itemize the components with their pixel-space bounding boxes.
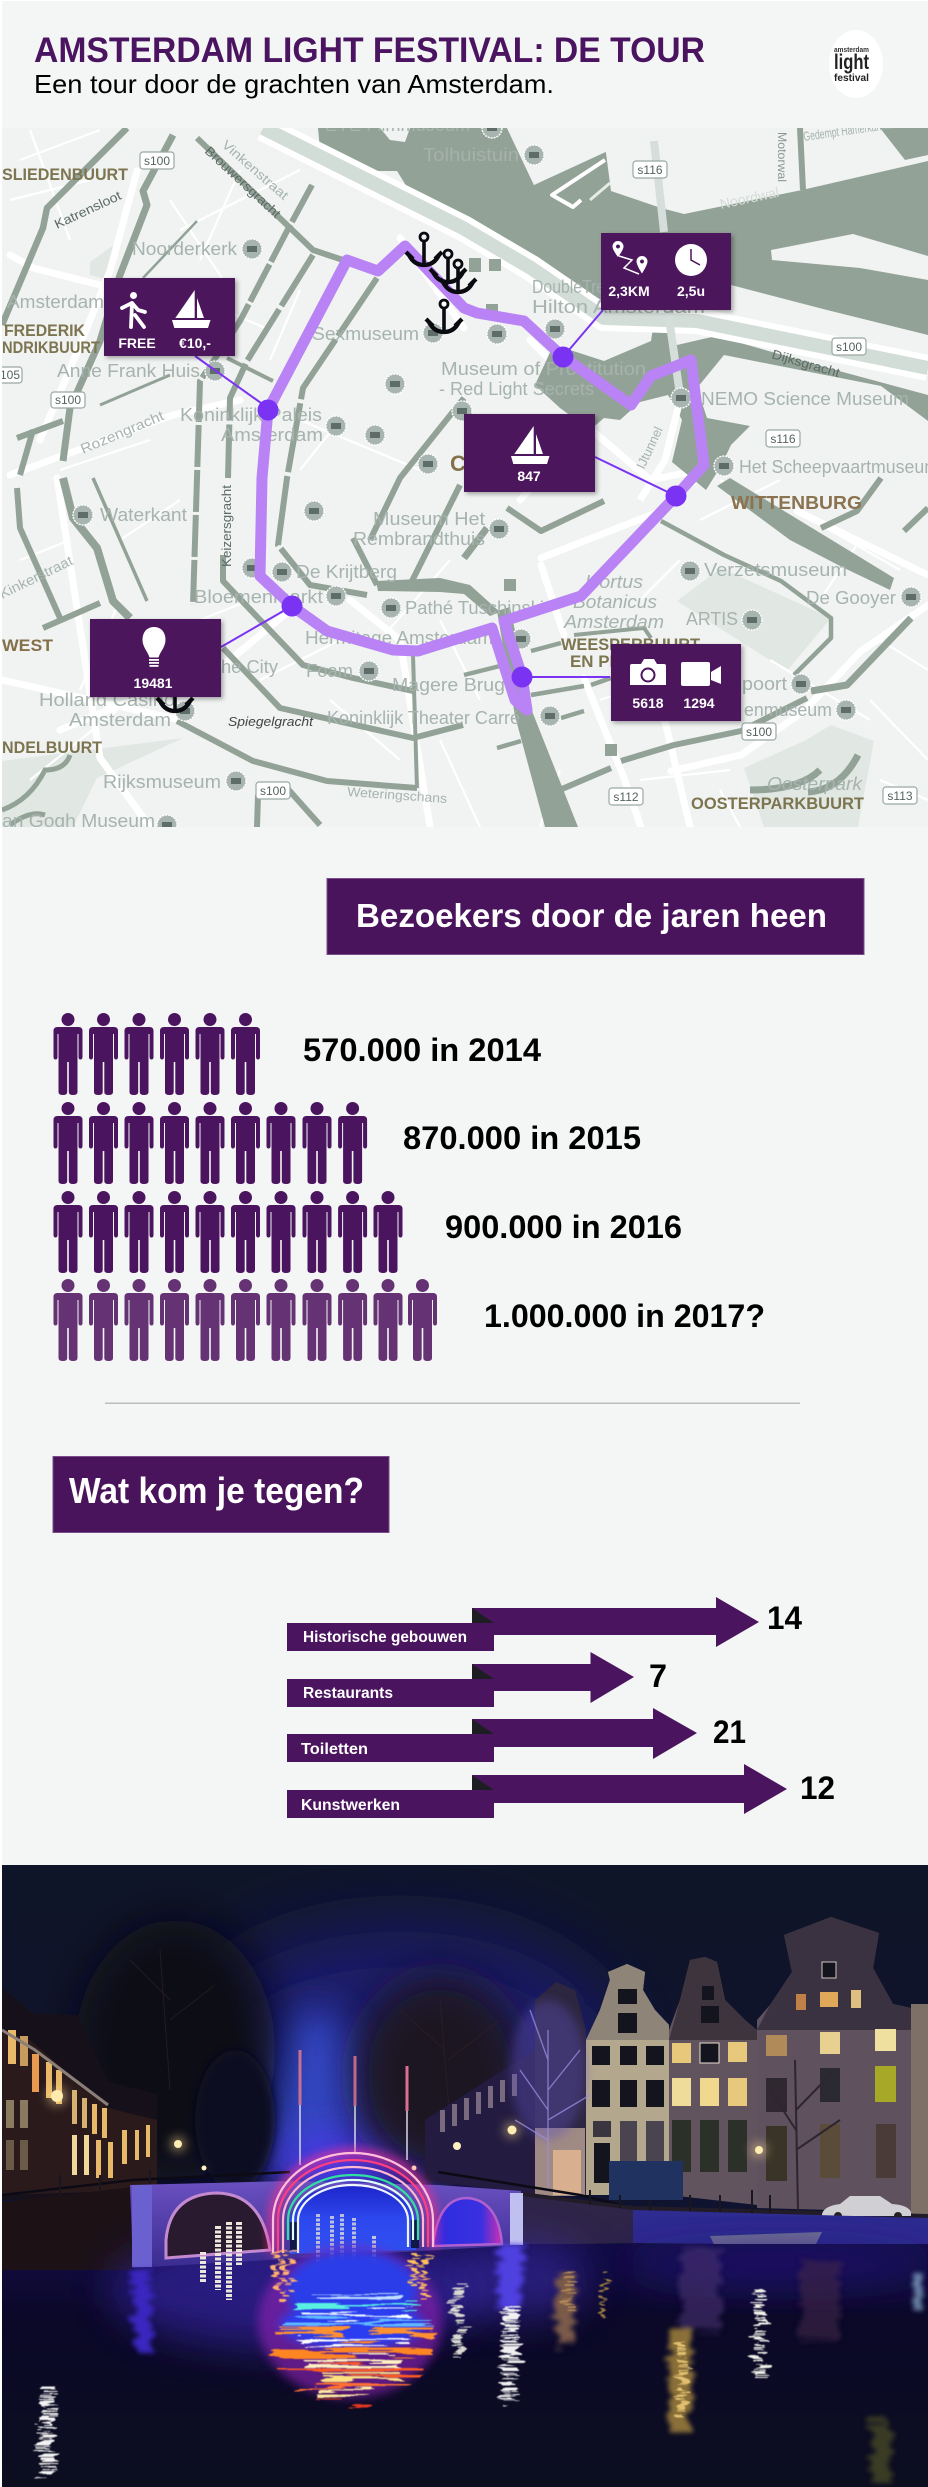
map labels: EYE Filmmuseum	[325, 115, 470, 135]
callout: free walk and boat price: FREE	[118, 335, 156, 351]
road shields	[0, 152, 917, 805]
callout: free walk and boat price	[104, 278, 235, 356]
map labels: OOSTERPARKBUURT	[691, 794, 865, 813]
callout: boats count: 847	[517, 468, 541, 484]
road shields: 105	[0, 368, 20, 382]
logo: amsterdam light festival: amsterdam	[834, 47, 869, 54]
map labels: Oosterpark	[767, 774, 863, 794]
heading: wat kom je tegen	[53, 1456, 389, 1532]
map labels: Museum Het	[373, 509, 485, 529]
road shields: s100	[55, 393, 81, 407]
rainbow arches	[273, 2153, 433, 2253]
map labels: Spiegelgracht	[228, 714, 314, 729]
title: AMSTERDAM LIGHT FESTIVAL: DE TOUR	[34, 31, 705, 70]
road shields: s100	[144, 154, 170, 168]
callout: boats count	[464, 414, 595, 492]
map labels: Katrensloot	[52, 188, 124, 232]
map labels: ARTIS	[686, 609, 738, 629]
water bodies	[318, 128, 928, 827]
row 2014: 570.000 in 2014	[303, 1032, 541, 1068]
central colourful reflection	[258, 2246, 442, 2408]
map labels: Rozengracht	[78, 407, 166, 457]
map labels: Magere Brug	[392, 675, 505, 695]
map labels: Motorwal	[775, 132, 789, 182]
map labels: De Krijtberg	[296, 562, 397, 582]
quay walls	[521, 2196, 633, 2245]
arrow: toiletten: 21	[713, 1714, 746, 1750]
callout: photos and videos count: 5618	[632, 695, 664, 711]
map labels: Dijksgracht	[770, 346, 842, 380]
road shields: s100	[836, 340, 862, 354]
map labels: WEST	[2, 636, 54, 655]
map labels: Holland Casino	[39, 690, 175, 710]
map labels: De Gooyer	[806, 588, 896, 608]
map labels: Rijksmuseum	[103, 772, 221, 792]
map labels: Keizersgracht	[219, 485, 234, 567]
railing and quay ground	[2, 2170, 624, 2205]
map labels: NEMO Science Museum	[701, 389, 909, 409]
arrow: restaurants	[287, 1652, 667, 1707]
callout: free walk and boat price: €10,-	[179, 335, 211, 351]
logo: amsterdam light festival: festival	[834, 72, 869, 84]
map labels: poort	[742, 674, 787, 694]
right buildings	[535, 1982, 586, 2195]
bridge	[130, 2181, 521, 2268]
row 2015: 870.000 in 2015	[403, 1120, 641, 1156]
map labels: Koninklijk Paleis	[180, 405, 322, 425]
map labels: Foam	[306, 661, 353, 681]
reflections in the arches	[203, 2214, 374, 2300]
callout: light bulbs count: 19481	[134, 675, 173, 691]
icon: walking person	[122, 292, 145, 327]
panel: header	[34, 30, 883, 99]
map labels: Tolhuistuin	[423, 145, 519, 165]
subtitle: Een tour door de grachten van Amsterdam.	[34, 69, 554, 99]
map labels: Waterkant	[100, 505, 187, 525]
street lights	[51, 2090, 763, 2170]
map labels: - Red Light Secrets	[439, 379, 594, 399]
arrow: historische gebouwen	[287, 1597, 802, 1651]
map labels: EN PLANTAGE	[570, 652, 690, 671]
callout: photos and videos count: 1294	[683, 695, 715, 711]
heading: bezoekers: Bezoekers door de jaren heen	[356, 897, 827, 934]
callout: distance and duration	[601, 233, 731, 310]
map labels: Noorderkerk	[132, 239, 238, 259]
map labels: Sexmuseum	[312, 324, 419, 344]
small boat	[710, 2232, 822, 2244]
map labels: Botanicus	[573, 592, 657, 612]
road shields: s113	[887, 789, 913, 803]
left arch	[166, 2193, 270, 2258]
blue truck	[609, 2161, 683, 2200]
arrow: historische gebouwen: 14	[767, 1600, 802, 1636]
map labels: NDELBUURT	[2, 738, 103, 757]
tour route line	[260, 246, 704, 710]
map labels: Rembrandthuis	[353, 529, 485, 549]
silver car	[822, 2196, 911, 2216]
map labels: Amsterdam	[7, 292, 104, 312]
map labels: SLIEDENBUURT	[2, 165, 129, 184]
arrow: restaurants: Restaurants	[303, 1685, 393, 1702]
right arch	[433, 2198, 502, 2246]
left buildings	[2, 1988, 86, 2200]
map labels: FREDERIK	[4, 321, 86, 340]
map labels: NDRIKBUURT	[2, 338, 101, 357]
icon: light bulb	[142, 627, 166, 667]
icon: route pins	[612, 241, 648, 274]
map labels: Hermitage Amsterdam	[305, 628, 493, 648]
heading: wat kom je tegen: Wat kom je tegen?	[69, 1470, 364, 1511]
water	[2, 2244, 928, 2487]
map labels: Museum of Prostitution	[441, 359, 646, 379]
arrow: restaurants: 7	[649, 1658, 667, 1694]
map labels: Bloemenmarkt	[194, 587, 323, 607]
vondelpark pond	[2, 755, 70, 825]
row 2017: 1.000.000 in 2017?	[484, 1298, 765, 1334]
map labels: Pathé Tuschinski	[405, 598, 544, 618]
map labels: Vinkenstraat	[219, 137, 292, 203]
map labels	[0, 115, 928, 831]
arrow: toiletten: Toiletten	[301, 1741, 368, 1758]
arrow: kunstwerken: Kunstwerken	[301, 1797, 400, 1814]
row 2017	[54, 1279, 765, 1361]
road shields: s100	[746, 725, 772, 739]
trees	[75, 1920, 275, 2180]
anchors	[157, 233, 476, 711]
map labels: WEESPERBUURT	[561, 635, 701, 654]
photo: light art bridge on a canal at night	[2, 1865, 928, 2487]
icon: video camera	[681, 662, 721, 686]
map labels: he City	[221, 657, 278, 677]
map labels: Anne Frank Huis	[57, 361, 200, 381]
callout: light bulbs count	[90, 619, 221, 697]
map labels: C	[450, 451, 466, 476]
map labels: Hortus	[585, 572, 643, 592]
map labels: Amsterdam	[221, 425, 323, 445]
central opening	[290, 2184, 416, 2254]
arrow: kunstwerken: 12	[800, 1770, 835, 1806]
arrow: kunstwerken	[287, 1764, 835, 1818]
map labels: Weteringschans	[347, 784, 448, 806]
road shields: s116	[637, 163, 663, 177]
row 2016	[54, 1191, 682, 1273]
road shields: s112	[613, 790, 639, 804]
icon: sailboat	[511, 426, 550, 464]
map points of interest	[73, 118, 921, 835]
callout: distance and duration: 2,5u	[677, 283, 705, 299]
map labels: Amsterdam	[563, 612, 664, 632]
connector lines	[195, 310, 676, 677]
map labels: Koninklijk Theater Carré	[327, 708, 520, 728]
map labels: Brouwersgracht	[202, 143, 284, 221]
map labels: enmuseum	[744, 700, 832, 720]
road shields: s116	[770, 432, 796, 446]
land in the water	[380, 128, 928, 280]
heading: bezoekers	[327, 878, 864, 954]
railway band	[263, 128, 928, 500]
map labels: IJtunnel	[633, 424, 666, 471]
map labels: Noordwal	[718, 184, 780, 212]
purple lit trees	[510, 2000, 586, 2140]
canals	[2, 128, 928, 827]
row 2016: 900.000 in 2016	[445, 1209, 682, 1245]
other water reflections	[142, 2248, 918, 2480]
icon: clock	[675, 244, 707, 276]
arrow: historische gebouwen: Historische gebouwen	[303, 1629, 467, 1646]
map: route through Amsterdam	[0, 115, 928, 835]
row 2015	[54, 1102, 641, 1184]
row 2014	[54, 1013, 541, 1095]
map labels: an Gogh Museum	[2, 811, 155, 831]
map labels: Amsterdam	[69, 710, 171, 730]
arrow chart: what you encounter	[287, 1597, 835, 1818]
map labels: DoubleTree	[532, 277, 614, 297]
pictogram chart: visitors per year	[54, 1013, 765, 1361]
flags	[299, 2105, 408, 2165]
arrow: toiletten	[287, 1708, 746, 1762]
icon: camera	[630, 659, 666, 685]
callout: distance and duration: 2,3KM	[608, 283, 650, 299]
map labels: Hilton Amsterdam	[532, 297, 705, 317]
map labels: WITTENBURG	[731, 493, 862, 513]
logo: amsterdam light festival	[829, 30, 883, 98]
logo: amsterdam light festival: light	[834, 51, 869, 74]
icon: sailboat	[172, 290, 210, 328]
callout: photos and videos count	[611, 644, 741, 721]
road shields: s100	[260, 784, 286, 798]
route stop markers	[258, 346, 686, 688]
map labels: Verzetsmuseum	[704, 560, 847, 580]
